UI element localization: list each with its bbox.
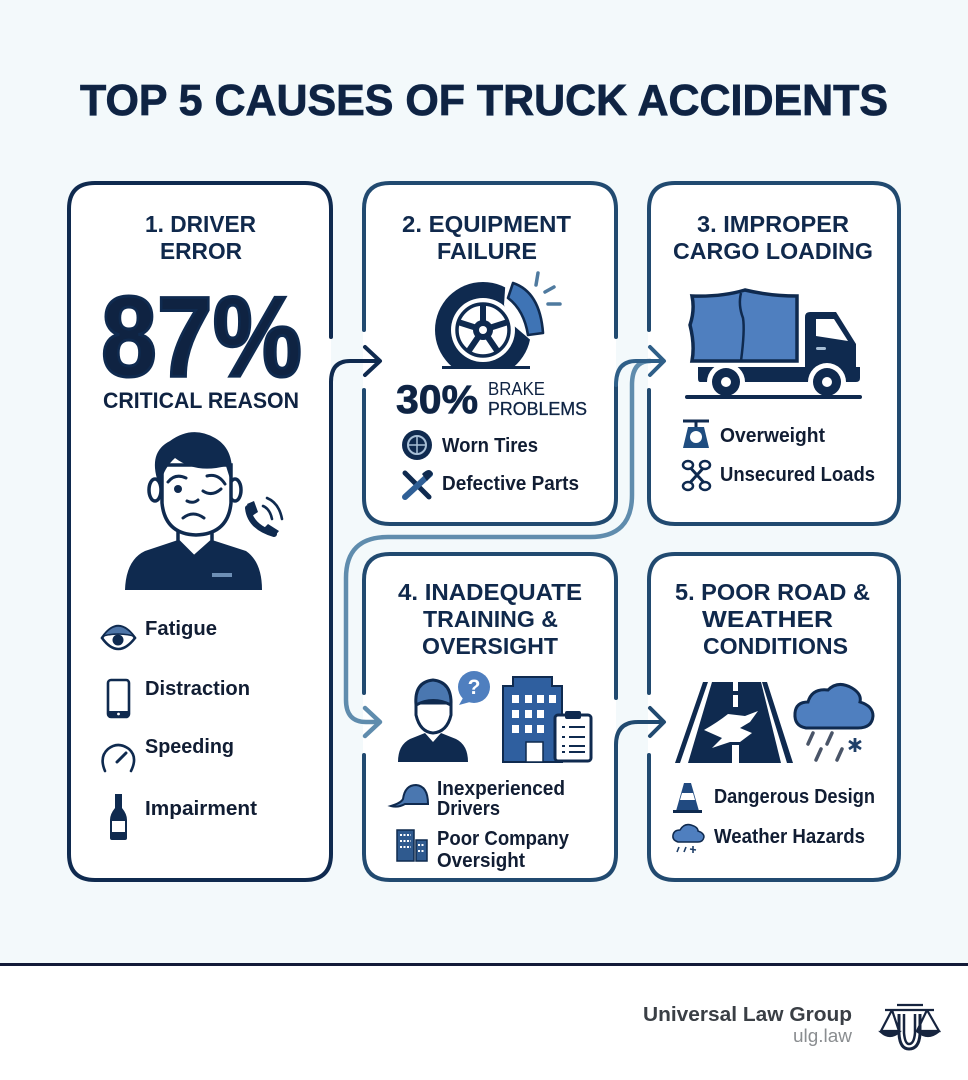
list item: weather hazards bbox=[673, 825, 865, 853]
list item: defective parts bbox=[405, 470, 579, 497]
heading: FAILURE bbox=[437, 238, 537, 264]
list item: speeding bbox=[103, 736, 234, 771]
arrow: panel 4 to panel 5 bbox=[616, 708, 664, 745]
heading: CONDITIONS bbox=[703, 633, 848, 659]
icon: overloaded truck bbox=[685, 290, 862, 401]
heading bbox=[398, 579, 582, 659]
heading: ERROR bbox=[160, 238, 242, 264]
icon: inexperienced driver bbox=[398, 671, 490, 762]
panel 3: improper cargo loading bbox=[648, 183, 899, 524]
heading: OVERSIGHT bbox=[422, 633, 558, 659]
heading: 3. IMPROPER bbox=[697, 211, 849, 237]
icon: distracted driver bbox=[125, 432, 282, 590]
heading bbox=[402, 211, 571, 264]
list item: dangerous design: Dangerous Design bbox=[714, 786, 875, 808]
heading: 5. POOR ROAD & bbox=[675, 579, 870, 605]
list item: inexperienced drivers bbox=[391, 778, 565, 820]
list item: overweight: Overweight bbox=[720, 425, 825, 447]
list item: fatigue: Fatigue bbox=[145, 618, 217, 640]
stat: 30% brake problems bbox=[396, 378, 587, 422]
list item: poor company oversight: Oversight bbox=[437, 850, 525, 872]
list item: poor company oversight: Poor Company bbox=[437, 828, 570, 850]
connector: light line looping from panel 2 to panels 3 and 4 bbox=[346, 361, 650, 736]
list item: inexperienced drivers: Drivers bbox=[437, 798, 500, 820]
stat: 30% brake problems: PROBLEMS bbox=[488, 399, 587, 419]
title: TOP 5 CAUSES OF TRUCK ACCIDENTS bbox=[80, 76, 888, 125]
brand name: Universal Law Group bbox=[643, 1004, 852, 1026]
stat: 30% brake problems: BRAKE bbox=[488, 379, 545, 399]
arrow: panel 2 to panel 3 bbox=[616, 347, 664, 385]
logo: scales and U bbox=[881, 1005, 939, 1049]
list item: overweight bbox=[683, 421, 825, 448]
footer bbox=[0, 963, 968, 1080]
list item: inexperienced drivers: Inexperienced bbox=[437, 778, 565, 800]
list item: worn tires bbox=[402, 430, 538, 460]
arrow: panel 1 to panel 2 bbox=[331, 347, 380, 382]
panel 2: equipment failure bbox=[363, 183, 616, 524]
list item: speeding: Speeding bbox=[145, 736, 234, 758]
heading: 1. DRIVER bbox=[145, 211, 256, 237]
list item: fatigue bbox=[102, 618, 217, 649]
heading: WEATHER bbox=[702, 606, 833, 632]
list item: impairment: Impairment bbox=[145, 798, 257, 820]
stat label: CRITICAL REASON bbox=[103, 388, 299, 413]
list item: worn tires: Worn Tires bbox=[442, 435, 538, 457]
panel 1: driver error bbox=[69, 183, 331, 880]
heading bbox=[673, 211, 873, 264]
panel 5: poor road and weather conditions bbox=[648, 554, 899, 880]
list item: unsecured loads bbox=[683, 461, 875, 490]
list item: unsecured loads: Unsecured Loads bbox=[720, 464, 875, 486]
stat: 87%: 87% bbox=[101, 274, 302, 401]
list item: impairment bbox=[110, 794, 257, 840]
list item: distraction: Distraction bbox=[145, 678, 250, 700]
list item: poor company oversight bbox=[397, 828, 570, 872]
list item: weather hazards: Weather Hazards bbox=[714, 826, 865, 848]
panel 4: inadequate training and oversight bbox=[363, 554, 616, 880]
heading: TRAINING & bbox=[423, 606, 558, 632]
icon: storm cloud bbox=[795, 684, 873, 760]
heading bbox=[675, 579, 870, 659]
stat: 30% brake problems: 30% bbox=[396, 378, 478, 422]
heading: CARGO LOADING bbox=[673, 238, 873, 264]
list item: distraction bbox=[108, 678, 250, 717]
icon: cracked road bbox=[675, 682, 793, 763]
icon: inexperienced driver: ? bbox=[468, 676, 480, 699]
list item: dangerous design bbox=[673, 783, 875, 813]
list item: defective parts: Defective Parts bbox=[442, 473, 579, 495]
icon: company building and clipboard bbox=[503, 677, 591, 762]
heading: 2. EQUIPMENT bbox=[402, 211, 571, 237]
heading bbox=[145, 211, 256, 264]
heading: 4. INADEQUATE bbox=[398, 579, 582, 605]
website: ulg.law bbox=[793, 1026, 853, 1046]
icon: worn tire and brake bbox=[425, 273, 560, 382]
